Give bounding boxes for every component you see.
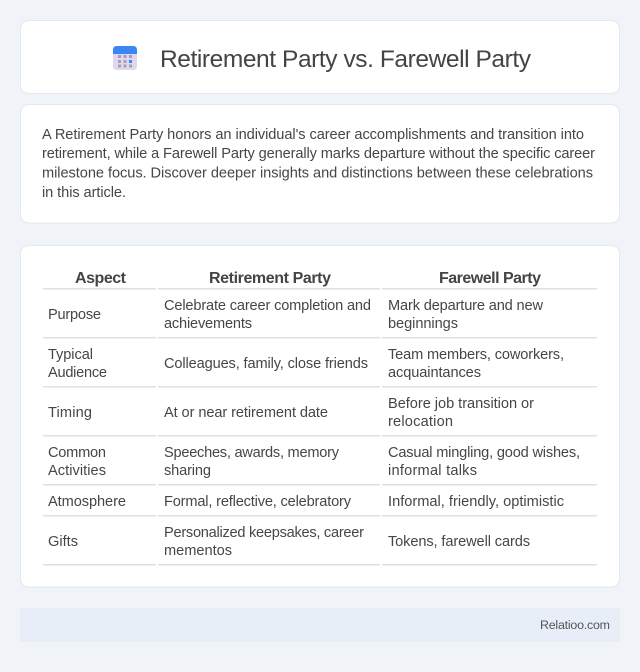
row: purpose: Celebrate career completion and	[164, 298, 371, 314]
row: common activities	[48, 445, 580, 479]
row: typical audience: Typical	[48, 347, 93, 363]
row: typical audience	[48, 347, 564, 381]
row: purpose: beginnings	[388, 316, 458, 332]
panel: introduction	[20, 104, 620, 223]
row: purpose	[48, 298, 543, 332]
row: gifts: mementos	[164, 543, 232, 559]
intro text	[42, 127, 595, 201]
table header row: Farewell Party	[439, 270, 541, 287]
intro text: milestone focus. Discover deeper insights and distinctions between these celebrations	[42, 166, 593, 182]
row: purpose: achievements	[164, 316, 252, 332]
panel: comparison table	[20, 246, 620, 587]
intro text: A Retirement Party honors an individual's career accomplishments and transition into	[42, 127, 584, 143]
row: gifts: Tokens, farewell cards	[388, 534, 530, 550]
row: atmosphere: Atmosphere	[48, 494, 126, 510]
row: typical audience: acquaintances	[388, 365, 481, 381]
intro text: in this article.	[42, 185, 126, 201]
row: timing: Timing	[48, 405, 92, 421]
row: common activities: sharing	[164, 463, 211, 479]
footer bar	[20, 608, 620, 642]
row: common activities: Speeches, awards, memory	[164, 445, 340, 461]
row: common activities: Common	[48, 445, 106, 461]
row: timing	[48, 396, 534, 430]
row: timing: At or near retirement date	[164, 405, 328, 421]
panel: title header	[20, 20, 620, 94]
row: gifts: Personalized keepsakes, career	[164, 525, 364, 541]
row: common activities: informal talks	[388, 463, 477, 479]
row: timing: relocation	[388, 414, 453, 430]
row: atmosphere: Informal, friendly, optimistic	[388, 494, 564, 510]
row: timing: Before job transition or	[388, 396, 534, 412]
row: atmosphere	[48, 494, 564, 510]
title: Retirement Party vs. Farewell Party	[160, 46, 532, 73]
intro text: retirement, while a Farewell Party generally marks departure without the specific career	[42, 146, 595, 162]
row: typical audience: Audience	[48, 365, 107, 381]
row: typical audience: Team members, coworkers,	[388, 347, 564, 363]
row: gifts	[48, 525, 530, 559]
row: common activities: Casual mingling, good wishes,	[388, 445, 580, 461]
row: common activities: Activities	[48, 463, 106, 479]
table header row: Aspect	[75, 270, 127, 287]
row: typical audience: Colleagues, family, close friends	[164, 356, 368, 372]
table header row: Retirement Party	[209, 270, 331, 287]
footer credit: Relatioo.com	[540, 618, 610, 632]
table header row	[75, 270, 541, 287]
row: purpose: Purpose	[48, 307, 101, 323]
row: atmosphere: Formal, reflective, celebratory	[164, 494, 352, 510]
icon: calendar	[113, 46, 137, 70]
row: purpose: Mark departure and new	[388, 298, 543, 314]
row: gifts: Gifts	[48, 534, 78, 550]
